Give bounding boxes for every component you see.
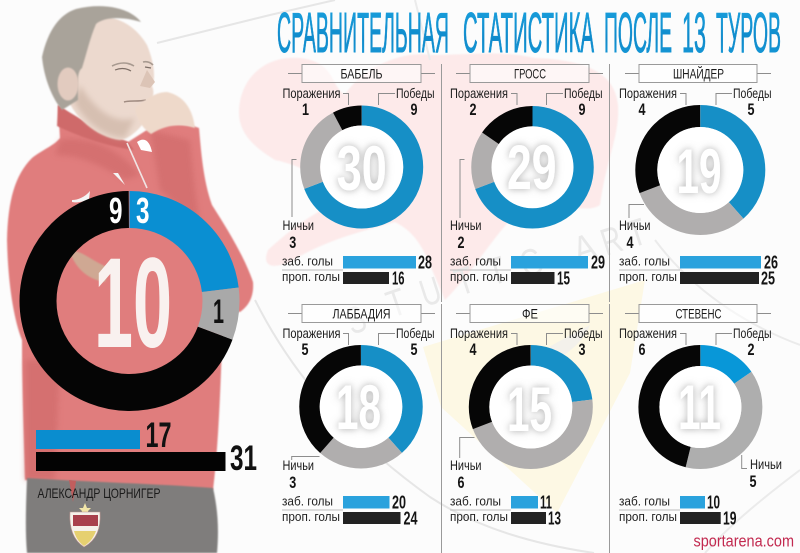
donut: Стевенс (649, 356, 752, 458)
panel: Гросс: Победы (564, 85, 602, 101)
goals: Лаббадия: проп. голы (282, 509, 340, 524)
goals: Бабель: 16 (392, 268, 404, 288)
watermark: club emblem: S (341, 298, 372, 343)
donut: Гросс (482, 116, 584, 218)
panel: Бабель: Победы (396, 85, 434, 101)
watermark: club emblem: A (568, 226, 602, 273)
goals: Шнайдер: заб. голы (619, 254, 670, 268)
panel: Бабель: 9 (410, 100, 418, 119)
donut: Фе (479, 355, 582, 459)
main donut defeats: 9 (109, 190, 122, 231)
goals: Стевенс: 19 (723, 508, 736, 528)
panel: Стевенс (619, 304, 782, 528)
panel: Шнайдер: ШНАЙДЕР (673, 64, 724, 82)
panel: Гросс: ГРОСС (514, 66, 546, 82)
panel: Бабель: Поражения (282, 85, 340, 101)
panel: Шнайдер: 4 (626, 233, 634, 252)
panel: Гросс: 9 (578, 100, 586, 119)
goals: Стевенс: проп. голы (619, 509, 677, 524)
title: СРАВНИТЕЛЬНАЯ (277, 1, 449, 65)
donut: Лаббадия (310, 355, 412, 458)
goals: Шнайдер (619, 252, 778, 288)
panel: Стевенс: Победы (733, 325, 772, 341)
goals: Бабель: проп. голы (282, 269, 340, 284)
donut: Шнайдер (646, 116, 754, 224)
goals: Стевенс: 10 (707, 492, 720, 512)
panel: Стевенс: 5 (750, 472, 756, 491)
panel: Стевенс: СТЕВЕНС (676, 306, 722, 322)
goals: Шнайдер: 26 (764, 252, 778, 272)
panel: Лаббадия: Победы (396, 325, 434, 341)
panel: Бабель (282, 64, 435, 288)
goals: Стевенс: заб. голы (619, 494, 670, 508)
goals: Гросс: 15 (557, 268, 570, 288)
goals: Гросс: 29 (591, 252, 605, 272)
panel: Стевенс: Поражения (619, 325, 677, 341)
main goals bars: 17 (146, 416, 172, 455)
goals: Лаббадия (282, 492, 418, 528)
panel: Гросс: Поражения (450, 85, 508, 101)
main goals bars: 31 (230, 439, 257, 478)
donut: Фе: 15 (507, 375, 552, 445)
panel: Лаббадия: 5 (410, 340, 418, 359)
panel: Фе: 4 (470, 340, 477, 359)
goals: Фе: 11 (540, 492, 552, 512)
goals: Бабель (282, 252, 432, 288)
panel: Бабель: 1 (302, 100, 309, 119)
watermark: club emblem: T (622, 211, 652, 257)
panel: Стевенс: Ничьи (750, 456, 782, 472)
title: ПОСЛЕ (604, 1, 672, 65)
goals: Фе (450, 492, 561, 528)
goals: Стевенс (619, 492, 736, 528)
goals: Лаббадия: 20 (392, 492, 406, 512)
goals: Шнайдер: проп. голы (619, 269, 677, 284)
panel: Лаббадия: Поражения (282, 325, 340, 341)
panel: Гросс: 2 (458, 233, 464, 252)
panel: Лаббадия (282, 304, 435, 528)
panel: Фе: Поражения (450, 325, 508, 341)
panel: Гросс (450, 64, 605, 288)
main donut draws: 1 (213, 293, 224, 331)
watermark: club emblem: T (450, 259, 480, 305)
goals: Бабель: 28 (418, 252, 432, 272)
goals: Гросс: заб. голы (450, 254, 501, 268)
donut: Стевенс: 11 (678, 373, 721, 443)
panel: Гросс: 2 (470, 100, 476, 119)
goals: Бабель: заб. голы (282, 254, 333, 268)
panel: Лаббадия: Ничьи (282, 457, 314, 473)
donut: Бабель (310, 116, 413, 218)
donut: Бабель: 30 (337, 134, 387, 204)
panel: Шнайдер: 5 (748, 100, 754, 119)
panel: Шнайдер (619, 64, 778, 288)
panel: Лаббадия: 5 (302, 340, 308, 359)
donut: Лаббадия: 18 (336, 373, 381, 443)
main donut: Zorniger (38, 190, 224, 392)
panel: Лаббадия: 3 (289, 473, 296, 492)
watermark: club emblem: T (482, 249, 512, 295)
goals: Гросс: проп. голы (450, 269, 508, 284)
watermark: club emblem: U (415, 269, 447, 316)
goals: Шнайдер: 25 (761, 268, 775, 288)
donut: Шнайдер: 19 (676, 137, 722, 207)
column dividers (442, 64, 610, 553)
panel: Бабель: Ничьи (282, 217, 314, 233)
title: 13 (682, 1, 706, 65)
panel: Стевенс: 2 (748, 340, 754, 359)
panel: Гросс: Ничьи (450, 217, 482, 233)
main goals bars (36, 416, 257, 478)
panel: Шнайдер: 4 (638, 100, 646, 119)
watermark: club emblem: G (515, 240, 549, 287)
panel: Фе: Победы (564, 325, 602, 341)
main donut wins: 3 (136, 190, 150, 231)
watermark: club emblem: T (381, 281, 412, 327)
photo: coach Alexander Zorniger (7, 6, 253, 553)
goals: Фе: проп. голы (450, 509, 508, 524)
panel: Шнайдер: Ничьи (619, 217, 650, 233)
panel: Фе: 6 (458, 473, 464, 492)
panel: Шнайдер: Поражения (619, 85, 677, 101)
watermark: club emblem: R (596, 218, 628, 265)
panel: Шнайдер: Победы (733, 85, 772, 101)
goals: Фе: 13 (548, 508, 561, 528)
panel: Стевенс: 6 (638, 340, 646, 359)
panel: Лаббадия: ЛАББАДИЯ (332, 306, 390, 322)
panel: Бабель: БАБЕЛЬ (340, 66, 382, 82)
panel: Фе: 3 (578, 340, 586, 359)
panel: Фе (450, 304, 603, 528)
coach name: АЛЕКСАНДР ЦОРНИГЕР (38, 485, 160, 501)
goals: Лаббадия: заб. голы (282, 494, 333, 508)
goals: Лаббадия: 24 (404, 508, 418, 528)
panel: Фе: Ничьи (450, 457, 482, 473)
donut: Гросс: 29 (507, 133, 556, 203)
goals: Гросс (450, 252, 605, 288)
main donut total: 10 (94, 232, 172, 375)
panel: Фе: ФЕ (522, 306, 538, 322)
panel: Бабель: 3 (289, 233, 296, 252)
goals: Фе: заб. голы (450, 494, 501, 508)
